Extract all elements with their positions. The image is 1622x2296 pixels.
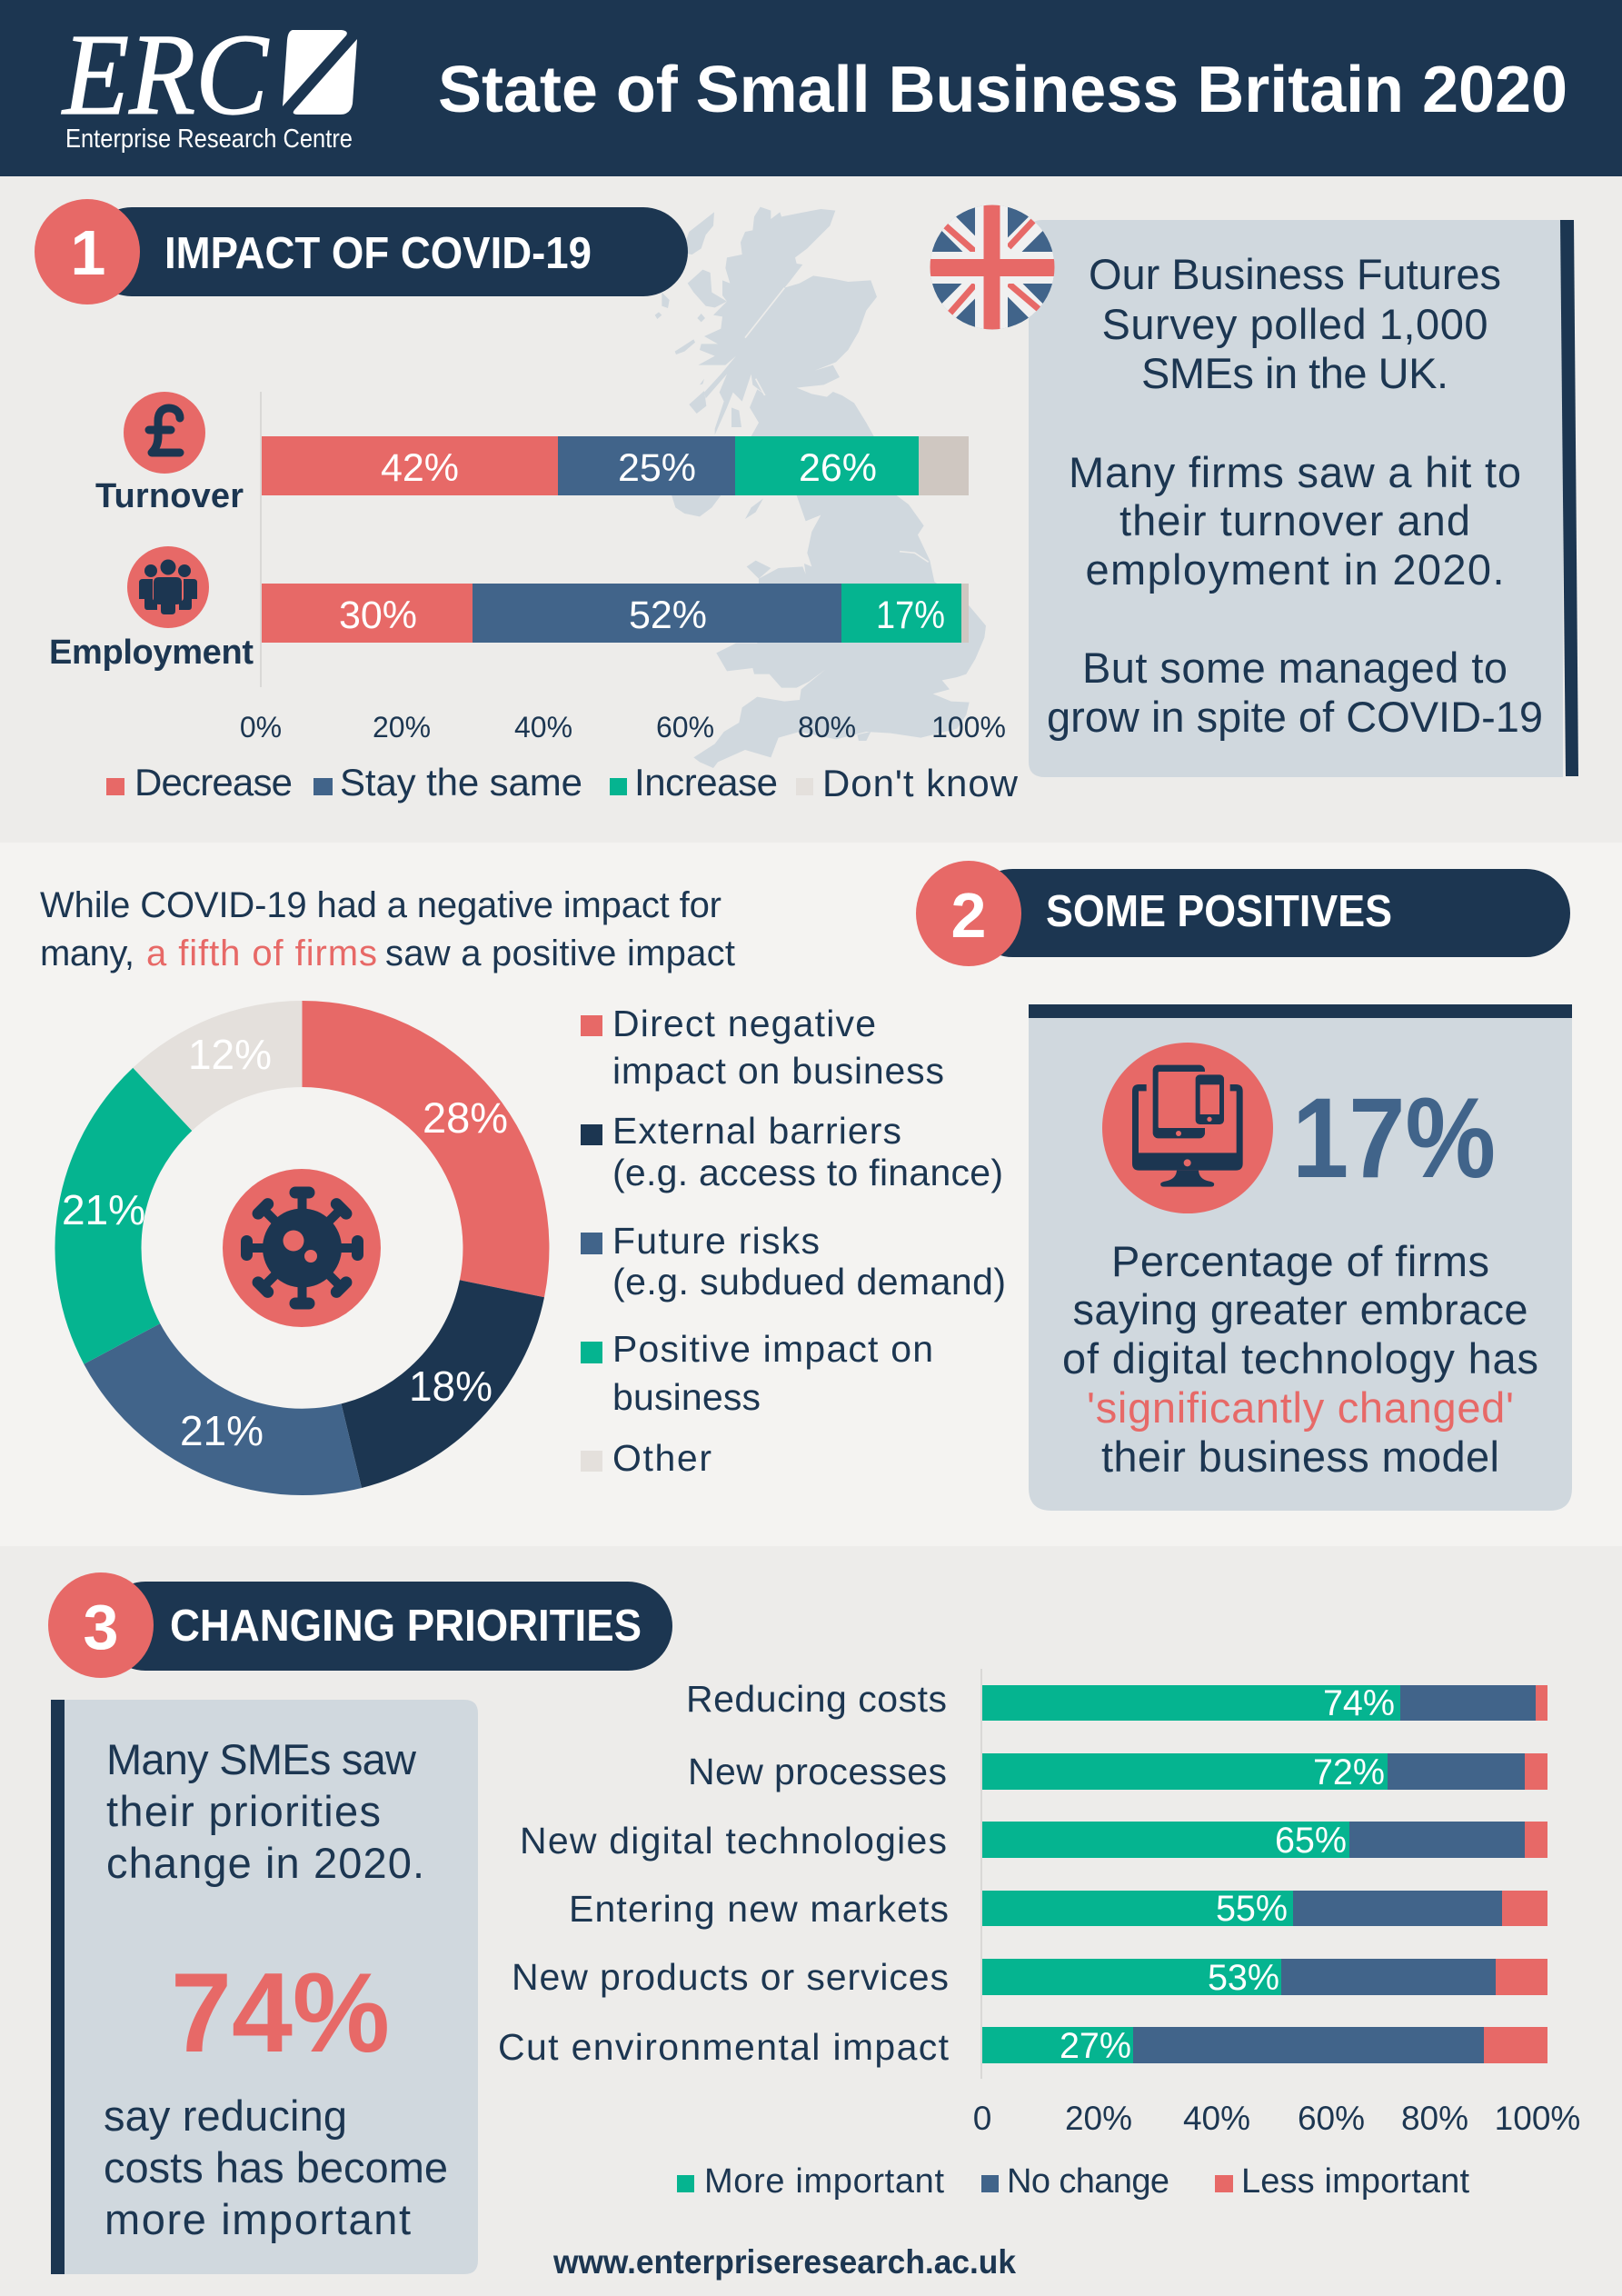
digital technology text: 'significantly changed' bbox=[1087, 1383, 1514, 1432]
panel: changing priorities: their priorities bbox=[106, 1787, 381, 1835]
bar: employment: 17% bbox=[876, 594, 945, 637]
panel: survey summary: their turnover and bbox=[1119, 496, 1470, 544]
legend: impact chart bbox=[106, 761, 1019, 804]
bar: employment: 30% bbox=[339, 594, 417, 637]
bar: new digital technologies bbox=[982, 1821, 1547, 1861]
panel: changing priorities bbox=[51, 1700, 478, 2274]
section 1 heading badge: IMPACT OF COVID-19 bbox=[164, 229, 592, 278]
legend: donut chart: External barriers bbox=[612, 1110, 901, 1152]
category labels: New processes bbox=[688, 1751, 947, 1792]
legend: priorities chart: Less important bbox=[1241, 2162, 1469, 2201]
donut chart: 18% bbox=[409, 1363, 493, 1410]
category labels: Reducing costs bbox=[686, 1678, 947, 1720]
panel: survey summary: SMEs in the UK. bbox=[1141, 349, 1448, 397]
bar: reducing costs: 74% bbox=[1323, 1683, 1395, 1723]
bar: new digital technologies: 65% bbox=[1275, 1821, 1347, 1861]
panel: survey summary bbox=[1029, 220, 1578, 777]
icon: devices bbox=[1102, 1043, 1273, 1213]
x axis labels bbox=[973, 2100, 1580, 2137]
legend: impact chart: Don't know bbox=[822, 762, 1019, 804]
digital technology text: their business model bbox=[1101, 1433, 1499, 1481]
donut chart: 28% bbox=[423, 1093, 508, 1142]
x axis labels: 20% bbox=[373, 711, 431, 744]
bar: turnover: 25% bbox=[618, 446, 696, 490]
bar: employment: 52% bbox=[629, 594, 707, 637]
x axis labels: 40% bbox=[514, 711, 572, 744]
section 2 heading badge: SOME POSITIVES bbox=[1046, 887, 1392, 936]
statistic: 17%: 17% bbox=[1292, 1075, 1496, 1202]
x axis labels: 20% bbox=[1065, 2100, 1132, 2137]
icon: pound bbox=[124, 392, 205, 474]
legend: priorities chart bbox=[677, 2162, 1469, 2201]
bar: new processes bbox=[982, 1752, 1547, 1792]
intro text: positive impact: many, bbox=[40, 933, 134, 973]
x axis labels: 100% bbox=[931, 711, 1006, 744]
icon: virus bbox=[223, 1169, 381, 1327]
section 1 heading badge: 1 bbox=[71, 217, 105, 288]
legend: donut chart: (e.g. subdued demand) bbox=[612, 1261, 1006, 1303]
legend: priorities chart: No change bbox=[1007, 2162, 1169, 2201]
category labels: New products or services bbox=[512, 1956, 949, 1998]
category labels: Cut environmental impact bbox=[498, 2026, 950, 2068]
website URL: www.enterpriseresearch.ac.uk bbox=[552, 2243, 1016, 2281]
digital technology text bbox=[1062, 1237, 1538, 1481]
panel: survey summary: grow in spite of COVID-19 bbox=[1047, 693, 1543, 741]
donut chart: 21% bbox=[180, 1407, 264, 1454]
bar: new products or services bbox=[982, 1958, 1547, 1998]
bar: cut environmental impact: 27% bbox=[1060, 2026, 1131, 2066]
x axis labels bbox=[240, 711, 1006, 744]
x axis labels: 40% bbox=[1183, 2100, 1250, 2137]
bar: employment bbox=[262, 584, 969, 643]
intro text: positive impact bbox=[40, 885, 735, 973]
category labels bbox=[498, 1678, 950, 2068]
x axis labels: 100% bbox=[1495, 2100, 1580, 2137]
header banner bbox=[0, 0, 1622, 176]
panel: survey summary: But some managed to bbox=[1082, 644, 1508, 692]
bar: cut environmental impact bbox=[982, 2026, 1547, 2066]
legend: impact chart: Decrease bbox=[134, 761, 293, 804]
title: State of Small Business Britain 2020 bbox=[438, 54, 1567, 126]
x axis labels: 60% bbox=[656, 711, 714, 744]
legend: donut chart: Future risks bbox=[612, 1220, 820, 1262]
panel: survey summary: employment in 2020. bbox=[1085, 545, 1505, 594]
digital technology text: Percentage of firms bbox=[1111, 1237, 1489, 1285]
legend: impact chart: Stay the same bbox=[340, 761, 582, 804]
legend: donut chart: Positive impact on bbox=[612, 1328, 933, 1370]
panel: changing priorities: more important bbox=[104, 2195, 411, 2243]
section 2 heading badge: 2 bbox=[951, 880, 986, 951]
ERC logo bbox=[61, 10, 357, 154]
intro text: positive impact: saw a positive impact bbox=[385, 933, 735, 973]
panel: changing priorities: Many SMEs saw bbox=[106, 1735, 417, 1783]
bar: entering new markets bbox=[982, 1889, 1547, 1929]
category labels: Entering new markets bbox=[569, 1888, 949, 1930]
intro text: positive impact: While COVID-19 had a negative impact for bbox=[40, 885, 721, 925]
panel: survey summary: Many firms saw a hit to bbox=[1069, 448, 1521, 496]
x axis labels: 0% bbox=[240, 711, 282, 744]
donut chart bbox=[55, 1001, 549, 1495]
section 1 heading badge bbox=[35, 199, 688, 304]
digital technology text: of digital technology has bbox=[1062, 1334, 1538, 1383]
legend: donut chart: Other bbox=[612, 1437, 711, 1479]
legend: donut chart: Direct negative bbox=[612, 1003, 876, 1044]
x axis labels: 0 bbox=[973, 2100, 991, 2137]
UK map background bbox=[655, 207, 986, 768]
icon: union flag bbox=[930, 205, 1054, 329]
intro text: positive impact: a fifth of firms bbox=[146, 933, 377, 973]
x axis labels: 80% bbox=[1401, 2100, 1468, 2137]
donut chart: 12% bbox=[188, 1031, 272, 1078]
panel: changing priorities: say reducing bbox=[104, 2091, 347, 2140]
bar: turnover: 26% bbox=[799, 446, 877, 490]
panel: survey summary: Survey polled 1,000 bbox=[1101, 300, 1488, 348]
legend: donut chart: (e.g. access to finance) bbox=[612, 1152, 1003, 1193]
category labels: New digital technologies bbox=[520, 1820, 947, 1862]
statistic: 74%: 74% bbox=[171, 1951, 390, 2076]
x axis labels: 60% bbox=[1298, 2100, 1365, 2137]
legend: donut chart: business bbox=[612, 1376, 761, 1418]
label: employment: Employment bbox=[49, 634, 254, 672]
panel: survey summary: Our Business Futures bbox=[1089, 250, 1501, 298]
bar: turnover bbox=[262, 436, 969, 495]
panel: changing priorities: change in 2020. bbox=[106, 1839, 424, 1887]
label: turnover: Turnover bbox=[95, 477, 244, 515]
bar: reducing costs bbox=[982, 1683, 1547, 1723]
digital technology text: saying greater embrace bbox=[1072, 1285, 1528, 1333]
x axis labels: 80% bbox=[798, 711, 856, 744]
bar chart: impact of COVID-19 bbox=[240, 392, 1006, 744]
panel: changing priorities: costs has become bbox=[104, 2143, 448, 2191]
donut chart: 21% bbox=[62, 1186, 145, 1233]
bar: entering new markets: 55% bbox=[1216, 1889, 1288, 1929]
ERC logo: ERC bbox=[61, 10, 270, 139]
ERC logo: Enterprise Research Centre bbox=[65, 125, 353, 154]
bar chart: changing priorities bbox=[498, 1669, 1580, 2137]
legend: donut chart: impact on business bbox=[612, 1050, 944, 1092]
panel: digital technology bbox=[1029, 1004, 1572, 1511]
icon: people bbox=[127, 546, 209, 628]
section 3 heading badge: CHANGING PRIORITIES bbox=[170, 1602, 642, 1651]
bar: turnover: 42% bbox=[381, 446, 459, 490]
section 2 heading badge bbox=[916, 861, 1570, 966]
section 3 heading badge bbox=[48, 1572, 672, 1678]
legend: priorities chart: More important bbox=[704, 2162, 944, 2201]
legend: impact chart: Increase bbox=[634, 761, 778, 804]
legend: donut chart bbox=[581, 1003, 1006, 1479]
bar: new products or services: 53% bbox=[1208, 1958, 1279, 1998]
bar: new processes: 72% bbox=[1313, 1752, 1385, 1792]
section 3 heading badge: 3 bbox=[84, 1592, 118, 1662]
